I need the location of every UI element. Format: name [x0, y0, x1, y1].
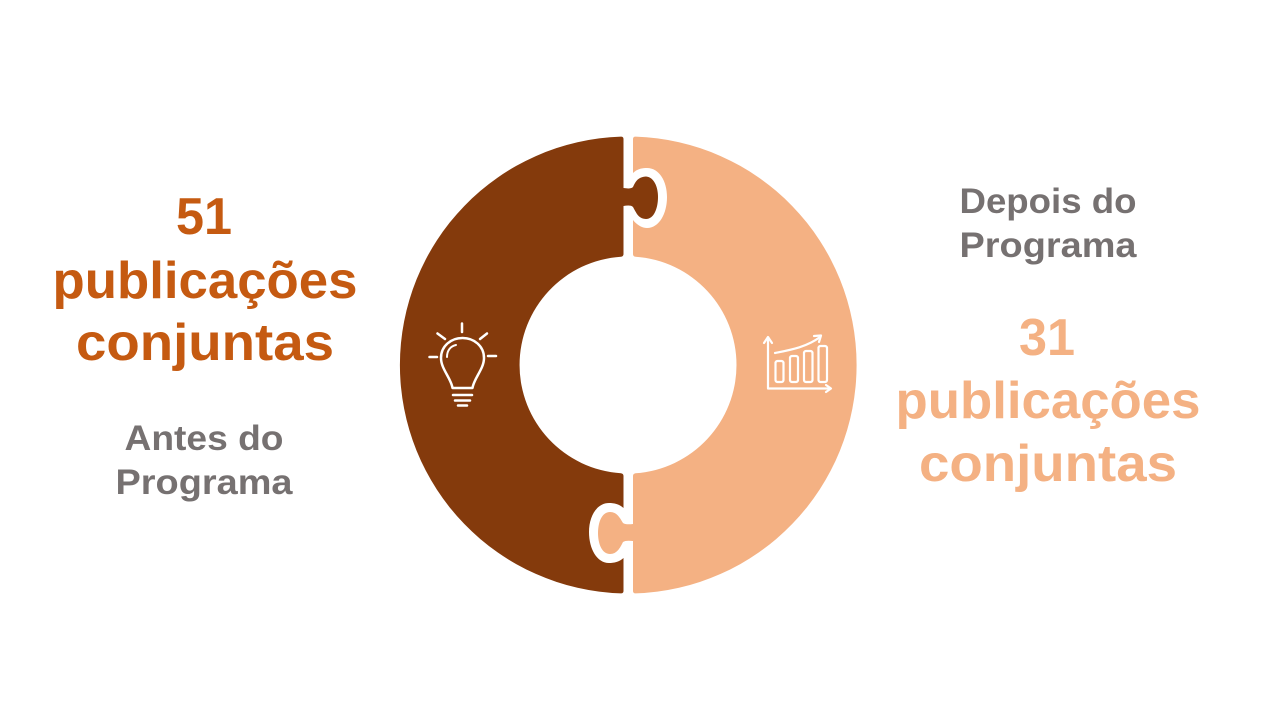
- panel: right text, after the program: [896, 182, 1200, 493]
- heading: 51 publicações conjuntas: publicações: [52, 252, 358, 310]
- puzzle donut chart: [400, 137, 857, 593]
- label: Antes do Programa: [116, 419, 293, 502]
- heading: 31 publicações conjuntas: 31: [1019, 309, 1075, 367]
- heading: 51 publicações conjuntas: 51: [176, 188, 232, 246]
- puzzle piece: right, light orange: [598, 137, 857, 593]
- label: Depois do Programa: Depois do: [960, 182, 1136, 221]
- label: Antes do Programa: Programa: [116, 463, 293, 502]
- puzzle piece: left, dark brown: [400, 137, 658, 593]
- icon: rising bar chart: [764, 336, 831, 392]
- label: Depois do Programa: Programa: [960, 226, 1137, 265]
- heading: 31 publicações conjuntas: publicações: [896, 372, 1200, 430]
- heading: 51 publicações conjuntas: conjuntas: [76, 314, 334, 372]
- panel: left text, before the program: [52, 188, 358, 502]
- heading: 51 publicações conjuntas: [52, 188, 358, 372]
- label: Antes do Programa: Antes do: [124, 419, 284, 458]
- heading: 31 publicações conjuntas: [896, 309, 1200, 493]
- heading: 31 publicações conjuntas: conjuntas: [919, 435, 1177, 493]
- label: Depois do Programa: [960, 182, 1137, 265]
- icon: light bulb: [430, 324, 496, 406]
